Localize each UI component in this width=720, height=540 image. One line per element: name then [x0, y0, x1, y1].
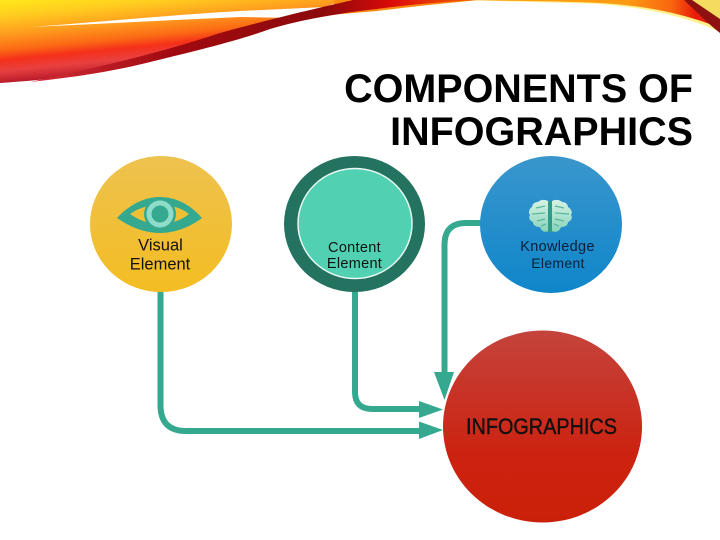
label: content element: Content	[328, 240, 381, 256]
banner: flame swoosh	[0, 0, 720, 83]
connector: content element to infographics	[355, 290, 443, 418]
panel: visual element	[90, 156, 232, 292]
panel: visual element: Element	[130, 256, 191, 274]
panel: knowledge element: Element	[531, 255, 585, 271]
label: infographics: INFOGRAPHICS	[466, 414, 617, 439]
title: INFOGRAPHICS	[390, 110, 693, 154]
label: visual element: Visual	[138, 236, 183, 254]
panel: infographics result	[443, 330, 642, 522]
connector: knowledge element to infographics	[434, 223, 482, 400]
panel: content element	[284, 156, 425, 292]
panel: knowledge element	[480, 156, 622, 293]
label: knowledge element: Knowledge	[520, 239, 595, 255]
panel: content element: Element	[327, 256, 382, 272]
title	[344, 67, 693, 154]
title: COMPONENTS OF	[344, 67, 693, 111]
connector: visual element to infographics	[160, 290, 443, 439]
icon: eye	[117, 197, 202, 233]
icon: brain	[529, 200, 572, 232]
